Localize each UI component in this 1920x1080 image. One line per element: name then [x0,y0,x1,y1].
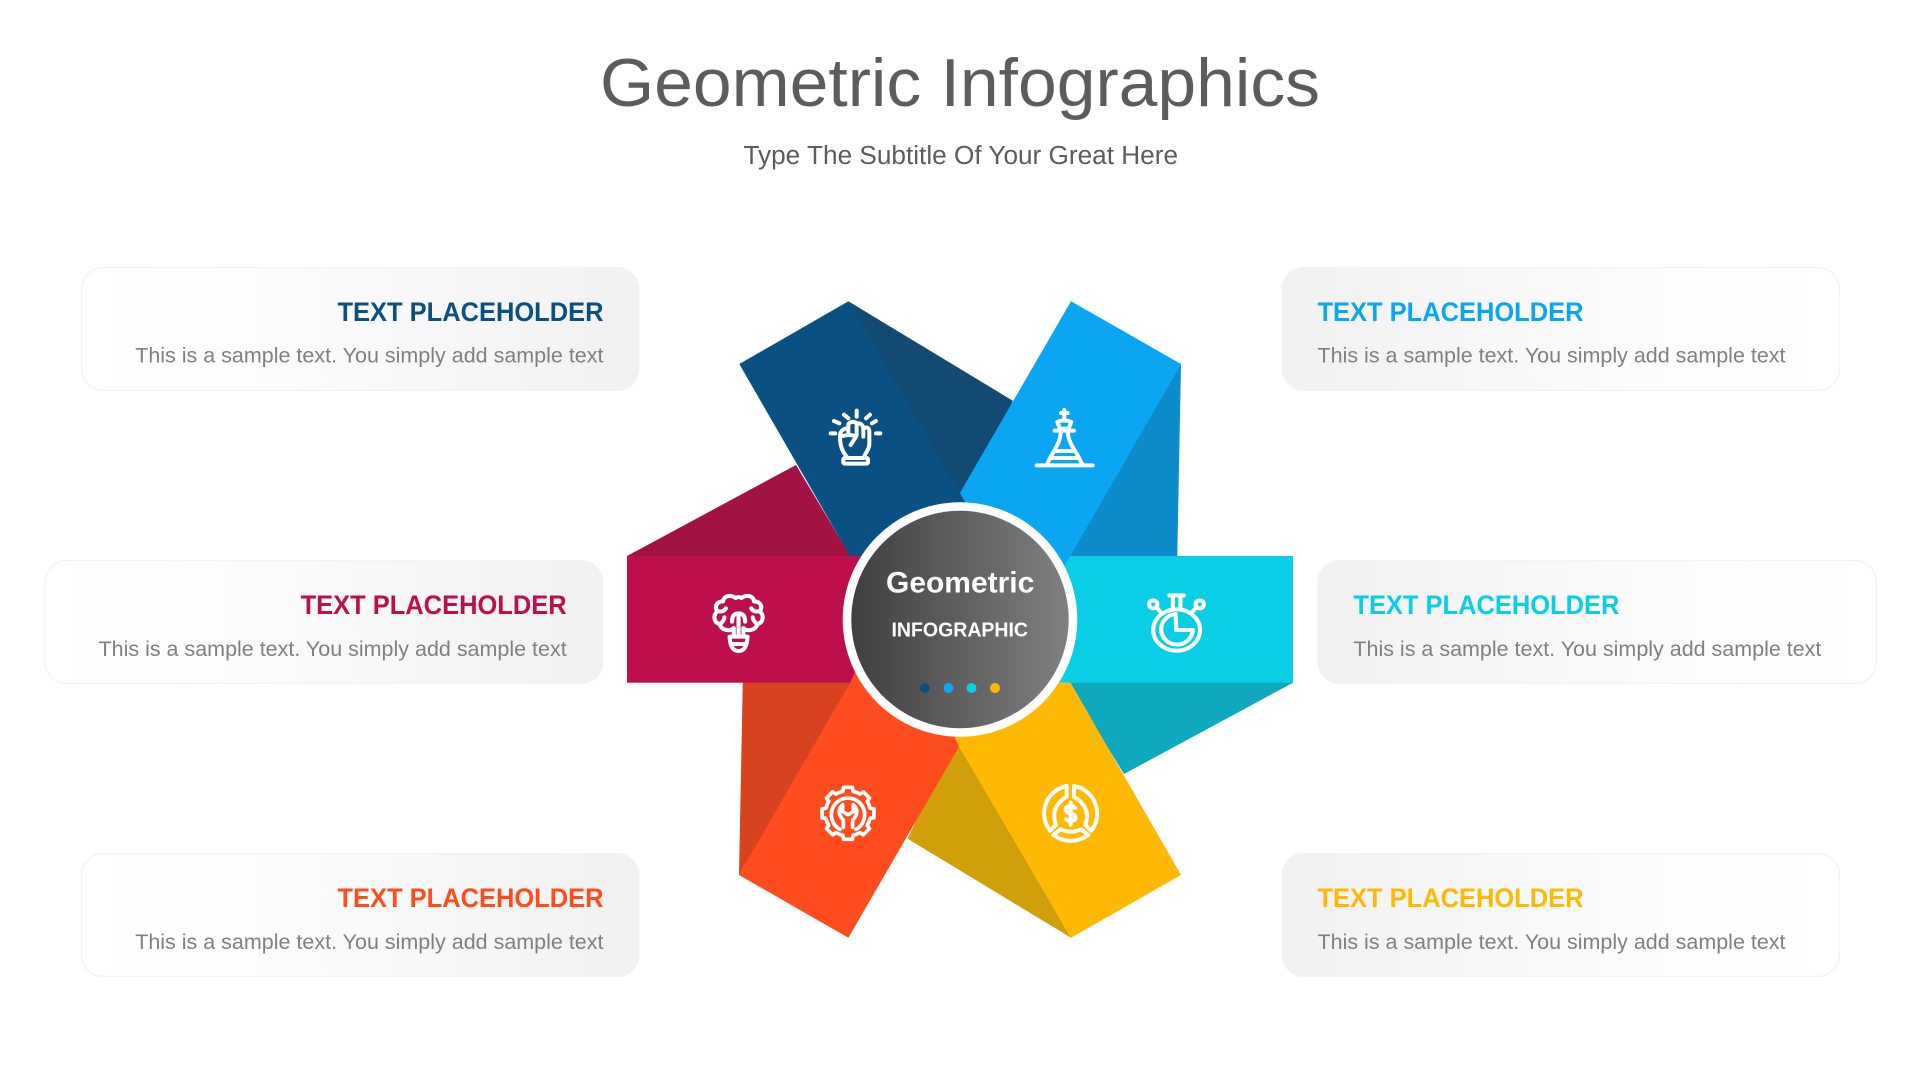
panel: top left text card [82,268,639,390]
title: Geometric Infographics [600,45,1320,121]
center circle [843,502,1077,737]
text: bottom left: This is a sample text. You simply add sample text [135,930,604,954]
heading: top right: TEXT PLACEHOLDER [1318,297,1584,327]
text: middle left: This is a sample text. You simply add sample text [98,637,567,661]
icon: brain bulb [714,596,763,651]
text: top left: This is a sample text. You simply add sample text [135,344,604,368]
heading: bottom right: TEXT PLACEHOLDER [1318,883,1584,913]
blade: light blue [960,301,1181,600]
fold: dark yellow [908,738,1071,938]
center subtitle: INFOGRAPHIC [892,620,1028,642]
blade: orange [739,660,960,938]
blade: yellow [954,683,1181,938]
icon: dollar segments [1044,786,1097,841]
blade: blue [739,301,965,620]
fold: dark blue [848,301,1013,510]
icon: raised fist [831,411,880,464]
fold: dark cyan [1060,670,1293,774]
icon: stopwatch [1149,595,1204,651]
icon: chess king [1037,410,1093,465]
heading: bottom left: TEXT PLACEHOLDER [338,883,604,913]
fold: dark orange [739,670,860,875]
panel: top right text card [1282,268,1840,390]
text: bottom right: This is a sample text. You simply add sample text [1318,930,1786,954]
icon: gear wrench [822,787,874,839]
fold: dark red [627,465,860,572]
fold: dark light blue [1060,364,1181,570]
blade: cyan [960,556,1293,683]
heading: middle right: TEXT PLACEHOLDER [1353,590,1619,620]
geometric pinwheel diagram [627,301,1293,938]
subtitle: Type The Subtitle Of Your Great Here [744,142,1178,170]
blade: crimson [627,556,960,683]
panel: bottom right text card [1282,854,1840,976]
heading: middle left: TEXT PLACEHOLDER [301,590,567,620]
panel: middle right text card [1318,560,1876,684]
center title: Geometric [886,567,1034,600]
pagination dots [920,683,1000,693]
panel: middle left text card [45,560,603,684]
text: top right: This is a sample text. You simply add sample text [1318,344,1786,368]
heading: top left: TEXT PLACEHOLDER [338,297,604,327]
text: middle right: This is a sample text. You simply add sample text [1353,637,1821,661]
panel: bottom left text card [82,854,639,976]
